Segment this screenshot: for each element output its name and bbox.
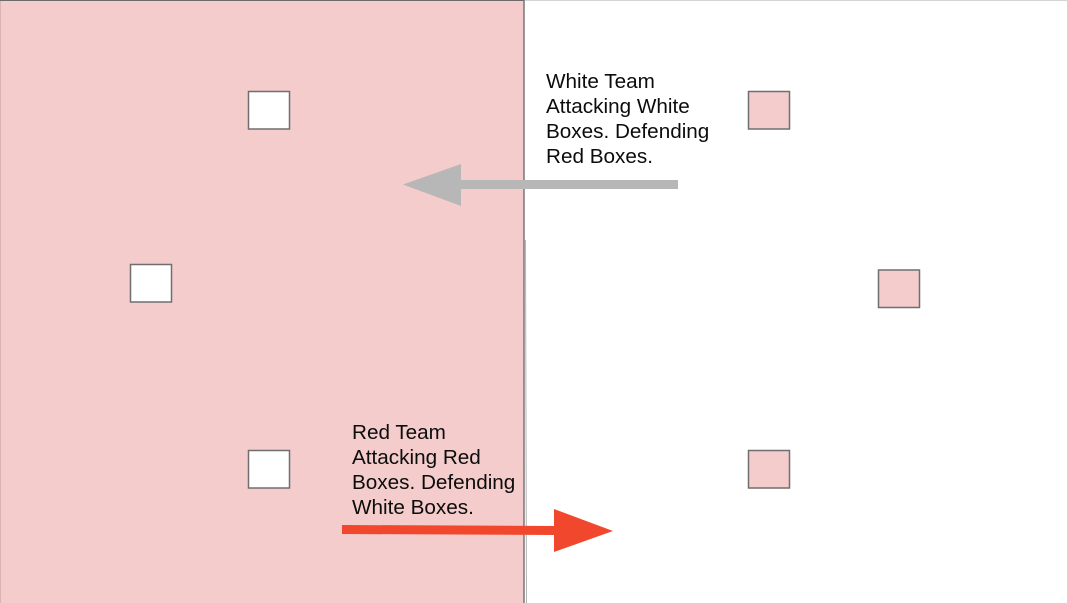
text: red team label: White Boxes.: [352, 496, 474, 519]
text: white team label: White Team: [546, 70, 655, 93]
red box: middle right: [878, 270, 920, 308]
text: white team label: Red Boxes.: [546, 145, 653, 168]
text: white team label: Boxes. Defending: [546, 120, 709, 143]
panel: red team territory: [0, 0, 526, 603]
text: white team label: Attacking White: [546, 95, 690, 118]
white box: bottom left: [248, 450, 290, 488]
white box: top left: [248, 92, 290, 129]
arrow: white team attack: [403, 164, 678, 206]
text: red team label: Attacking Red: [352, 446, 481, 469]
red box: bottom right: [748, 450, 790, 488]
white box: middle left: [130, 264, 172, 302]
text: red team label: Red Team: [352, 421, 446, 444]
text: red team label: Boxes. Defending: [352, 471, 515, 494]
arrow: red team attack: [342, 509, 613, 552]
red box: top right: [748, 92, 790, 129]
